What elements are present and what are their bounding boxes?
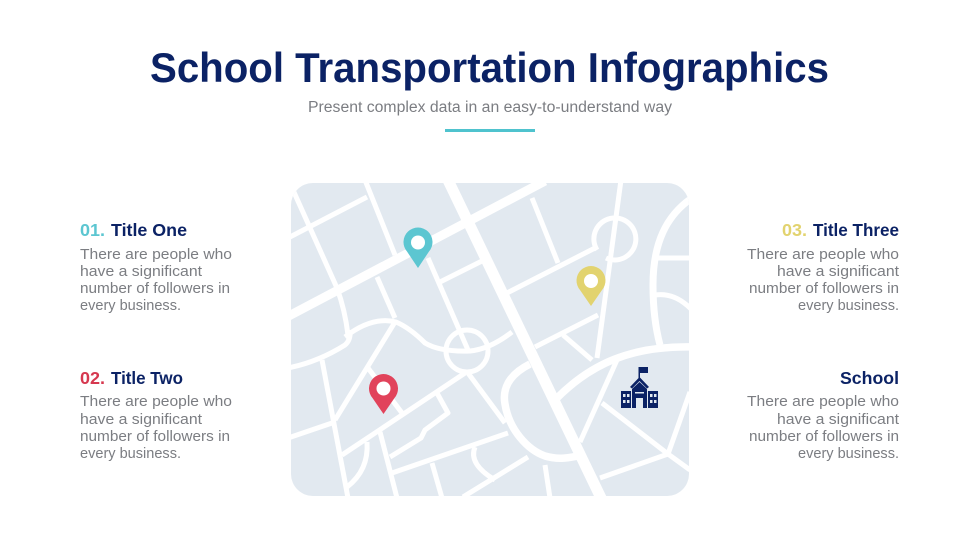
block: title two: every business. xyxy=(80,445,181,462)
block: title two: 02. xyxy=(80,368,105,388)
block: title two: number of followers in xyxy=(80,428,230,445)
icon: yellow pin xyxy=(576,266,606,306)
block: title two xyxy=(80,368,232,462)
block: school: have a significant xyxy=(777,411,900,428)
block: school: every business. xyxy=(798,445,899,462)
block: title two: have a significant xyxy=(80,411,203,428)
block: title three: 03. xyxy=(782,220,807,240)
block: title one: have a significant xyxy=(80,263,203,280)
title: School Transportation Infographics xyxy=(150,44,829,91)
block: title one: There are people who xyxy=(80,246,232,263)
block: title three: Title Three xyxy=(813,220,899,240)
title underline xyxy=(445,129,535,132)
block: title three: There are people who xyxy=(747,246,899,263)
subtitle: Present complex data in an easy-to-understand way xyxy=(308,99,672,116)
block: school: School xyxy=(840,368,899,388)
icon: school xyxy=(621,367,658,408)
block: title two: Title Two xyxy=(111,368,183,388)
icon: teal pin xyxy=(404,228,433,268)
block: title three xyxy=(747,220,900,314)
block: title one: 01. xyxy=(80,220,105,240)
block: title two: There are people who xyxy=(80,393,232,410)
block: school: There are people who xyxy=(747,393,899,410)
block: title three: have a significant xyxy=(777,263,900,280)
icon: red pin xyxy=(369,374,398,414)
panel: map xyxy=(285,178,695,500)
block: title three: number of followers in xyxy=(749,280,899,297)
block: title one: every business. xyxy=(80,297,181,314)
block: title three: every business. xyxy=(798,297,899,314)
block: title one xyxy=(80,220,232,314)
block: school: number of followers in xyxy=(749,428,899,445)
block: title one: number of followers in xyxy=(80,280,230,297)
block: school xyxy=(747,368,900,462)
block: title one: Title One xyxy=(111,220,187,240)
